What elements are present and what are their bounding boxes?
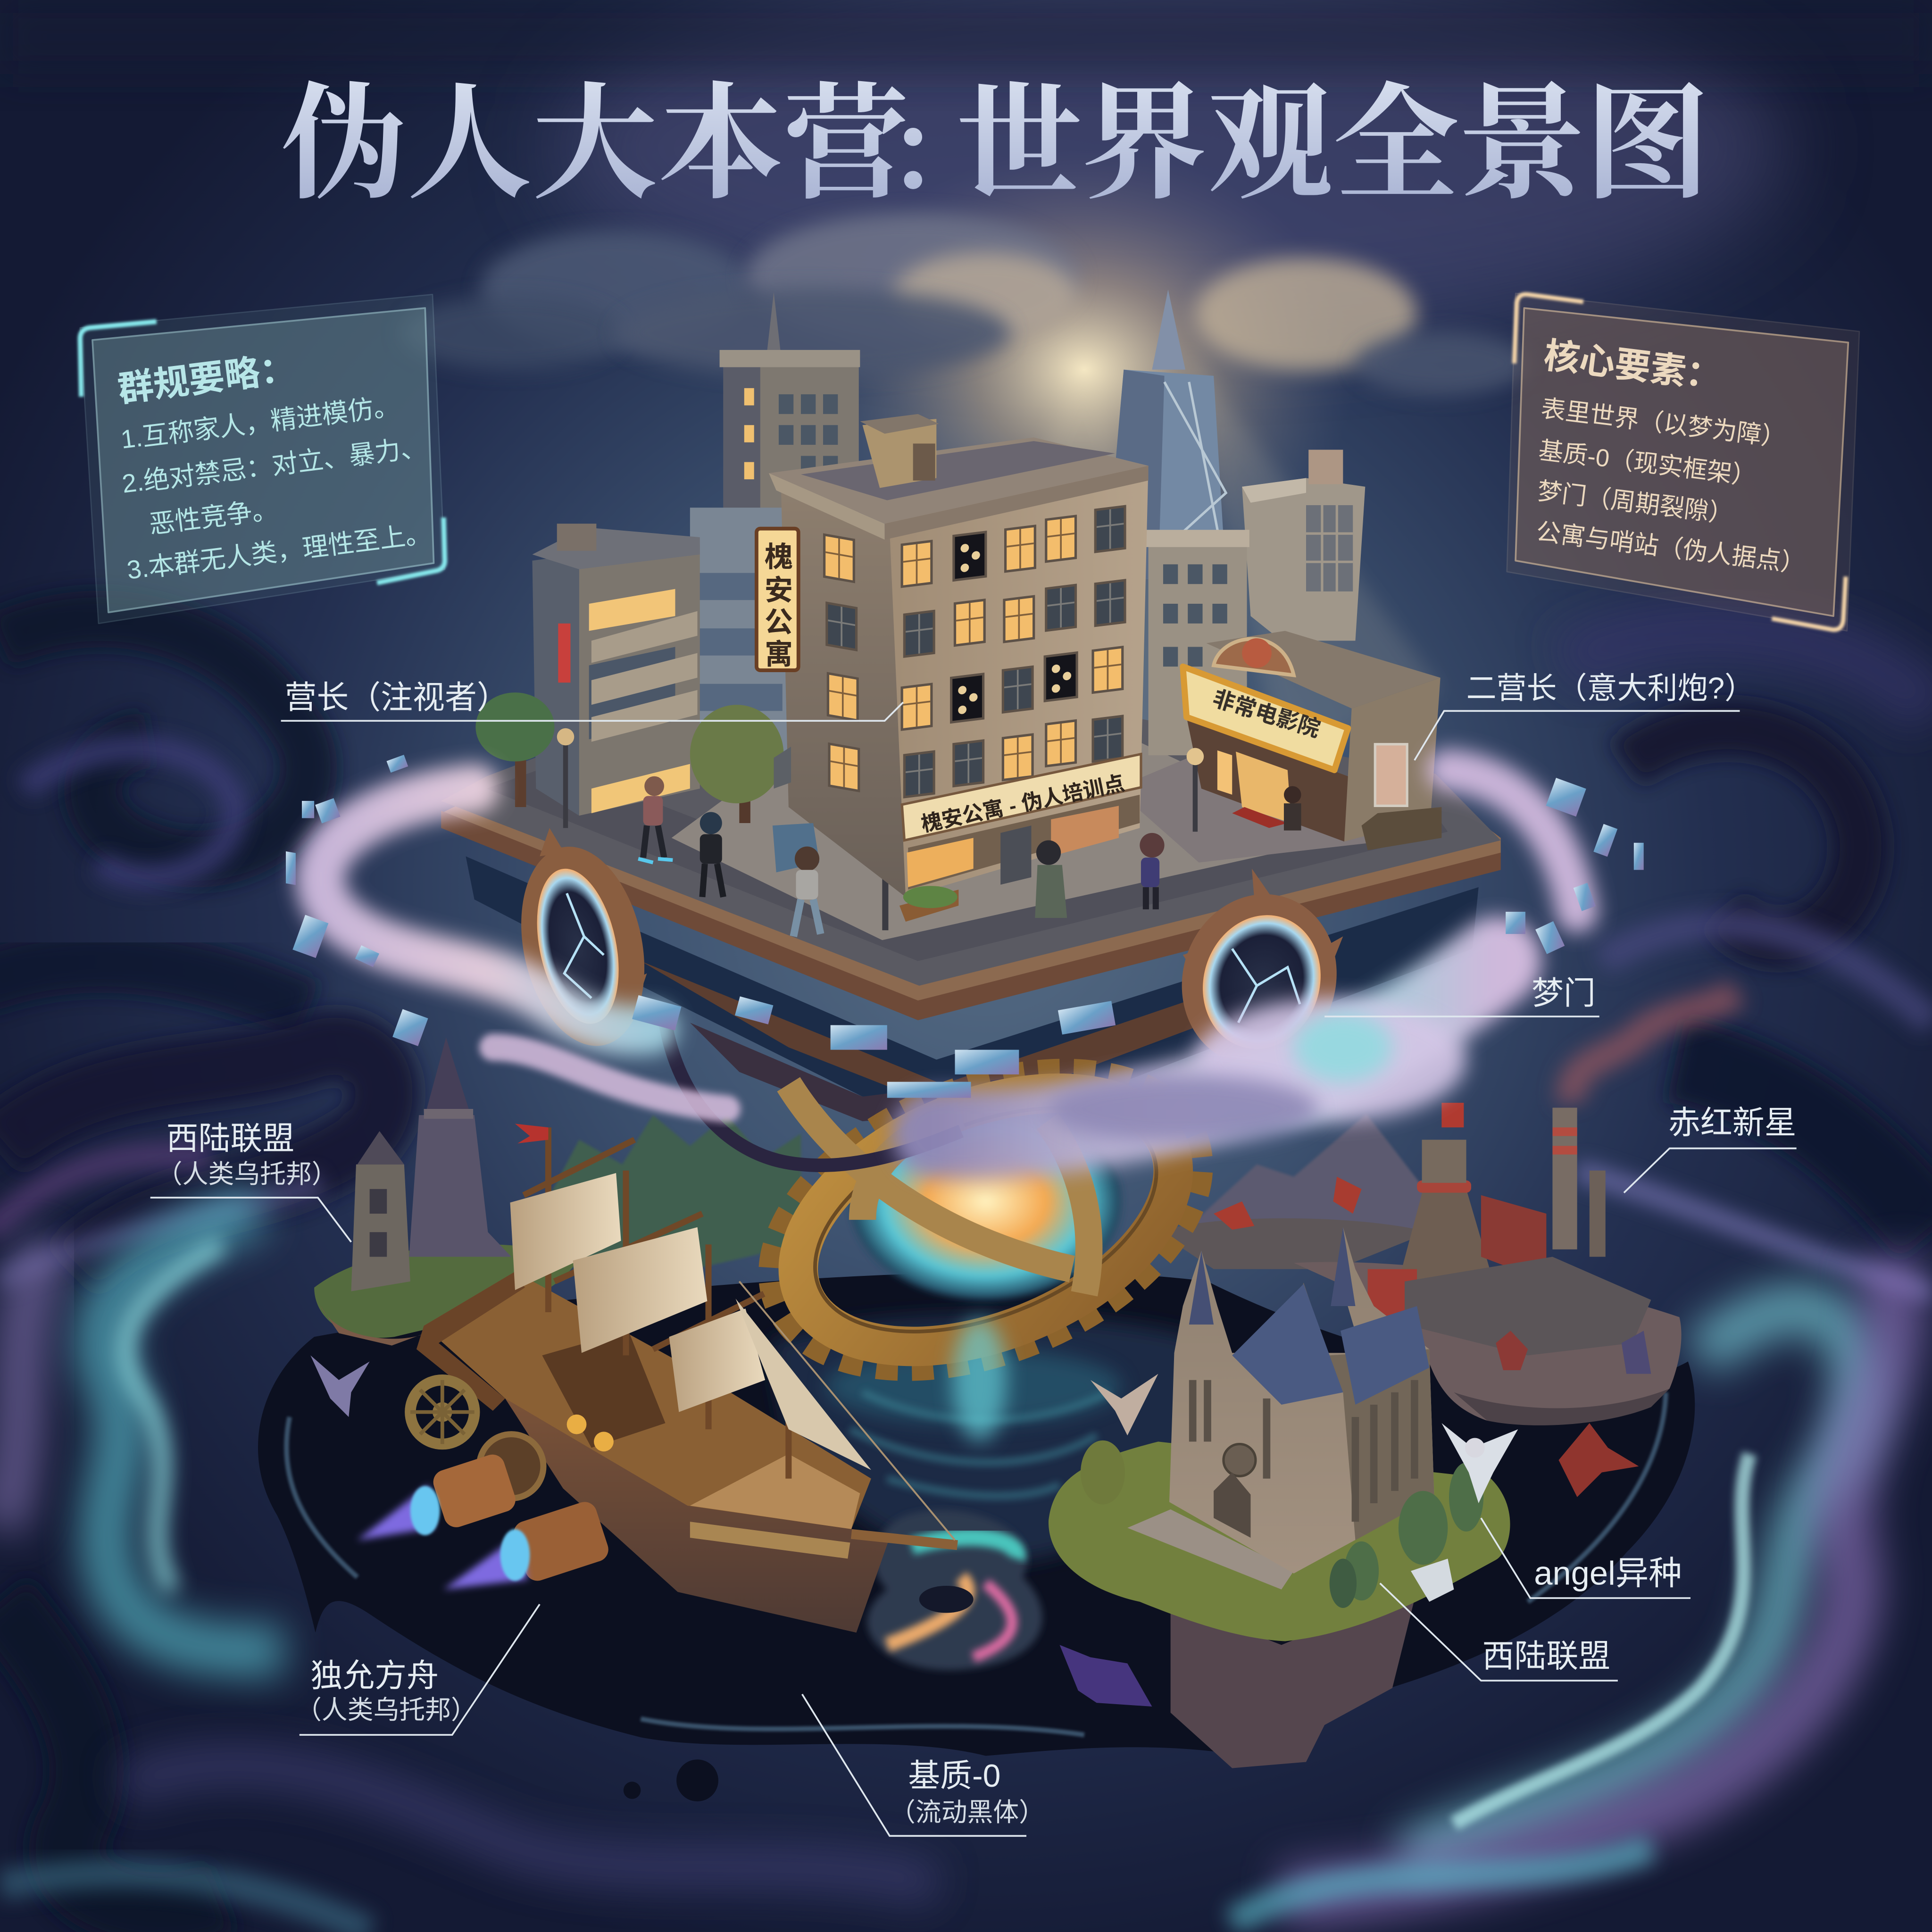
island: west alliance towers	[314, 1038, 579, 1346]
label: 独允方舟: （人类乌托邦）	[296, 1695, 477, 1724]
storm clouds	[400, 148, 1528, 789]
elements list: 公寓与哨站（伪人据点）	[1534, 518, 1807, 578]
airship	[310, 1124, 1639, 1707]
masts	[524, 1127, 789, 1479]
underworld: black fluid substrate	[258, 1272, 1695, 1801]
title: :	[894, 60, 932, 219]
dream portals	[504, 828, 1358, 1085]
icon: thrusters	[358, 1451, 612, 1590]
underside of floating platform	[466, 857, 1479, 1121]
iridescent oil sheen	[867, 1510, 1042, 1670]
rules list	[119, 391, 433, 585]
roof hut	[860, 414, 939, 488]
label: 西陆联盟 人类乌托邦	[150, 1121, 351, 1242]
label: 梦门: 梦门	[1532, 976, 1596, 1011]
elements list	[1534, 395, 1807, 578]
label: angel异种: angel异种	[1534, 1554, 1682, 1591]
windows	[823, 505, 1126, 799]
vertical sign: 槐	[765, 541, 793, 573]
label: 基质-0: （流动黑体）	[890, 1798, 1045, 1827]
label: 西陆联盟	[1380, 1583, 1618, 1681]
label: 基质-0	[802, 1694, 1045, 1836]
panel heading: 群规要略：	[116, 348, 298, 409]
icon: tall dark tower	[409, 1038, 511, 1257]
building: right mid block	[1146, 530, 1249, 755]
icon: small stone tower	[351, 1131, 410, 1291]
icon: angel creature	[1441, 1423, 1518, 1503]
label: 赤红新星	[1624, 1105, 1797, 1193]
label: 赤红新星: 赤红新星	[1668, 1105, 1797, 1141]
watcher eye line marker	[281, 702, 903, 721]
icon: tree left	[475, 692, 555, 807]
hull	[505, 1399, 890, 1632]
island: red nova mountain	[1158, 1114, 1441, 1269]
label: 西陆联盟: 西陆联盟	[1482, 1639, 1610, 1674]
building: glass skyscraper	[1105, 290, 1226, 579]
elements list: 表里世界（以梦为障）	[1540, 395, 1787, 452]
building: back-left tower	[720, 292, 860, 527]
icon: large brass gear	[735, 1021, 1236, 1418]
marquee sign: 非常电影院	[1210, 685, 1323, 742]
label: 营长: 营长（注视者）	[284, 680, 509, 716]
cinema	[1183, 631, 1441, 850]
flag	[515, 1124, 548, 1143]
icon: tree right	[690, 705, 783, 823]
vertical sign	[757, 529, 799, 670]
figure 2	[700, 812, 723, 897]
island: red nova factory	[1294, 992, 1737, 1425]
label: 独允方舟: 独允方舟	[310, 1658, 439, 1694]
elements list: 基质-0（现实框架）	[1537, 437, 1758, 491]
icon: fluid creatures	[310, 1355, 1639, 1707]
rules list: 3.本群无人类，理性至上。	[125, 518, 433, 585]
apartment building	[757, 414, 1149, 922]
shopfront	[899, 795, 1140, 922]
residents	[638, 776, 1301, 936]
gear core	[666, 1021, 1236, 1441]
elements list: 梦门（周期裂隙）	[1536, 477, 1735, 529]
building: blue-grey rear block	[690, 508, 789, 754]
label: 独允方舟	[296, 1604, 540, 1735]
figure 4	[1035, 841, 1067, 918]
marquee sign	[1183, 666, 1348, 770]
title: 世界观全景图	[956, 43, 1710, 224]
rules list: 1.互称家人，精进模仿。	[119, 391, 401, 454]
memory shards	[286, 755, 1644, 1098]
storefront sign	[902, 754, 1141, 841]
vertical sign: 安	[765, 575, 793, 606]
movie poster	[1375, 744, 1407, 806]
icon: street lamp	[557, 728, 1204, 930]
building: right pale tower	[1242, 450, 1365, 641]
distant forest	[517, 1115, 801, 1282]
title: 伪人大本营	[281, 43, 909, 224]
dream mist	[320, 770, 1577, 1143]
label: 二营长: 二营长（意大利炮?）	[1466, 671, 1755, 705]
figure 1	[638, 776, 673, 863]
trees and lamps	[475, 692, 1204, 930]
label: 基质-0: 基质-0	[908, 1758, 1000, 1794]
storefront sign: 槐安公寓 - 伪人培训点	[919, 772, 1126, 836]
west alliance cathedral island	[1049, 1227, 1518, 1768]
icon: tall chimney	[1552, 1108, 1606, 1257]
icon: factory smoke	[1572, 992, 1737, 1103]
vertical sign: 寓	[765, 639, 793, 670]
cathedral	[1169, 1227, 1434, 1574]
vertical sign: 公	[765, 607, 793, 638]
rules list: 2.绝对禁忌：对立、暴力、	[120, 432, 428, 499]
label: 二营长	[1415, 671, 1755, 760]
rules list: 恶性竞争。	[148, 494, 279, 539]
figure 6	[1284, 786, 1301, 831]
label: angel异种	[1481, 1518, 1690, 1598]
icon: reactor tower	[1399, 1103, 1493, 1282]
sails	[510, 1173, 621, 1290]
figure 3	[793, 847, 821, 936]
label: 西陆联盟 人类乌托邦: （人类乌托邦）	[157, 1159, 338, 1189]
building: left balcony block	[532, 524, 700, 816]
panel: core elements	[1507, 293, 1859, 631]
portal right	[1160, 869, 1358, 1085]
portal left	[504, 828, 662, 1058]
city skyline	[532, 290, 1365, 816]
title	[281, 43, 1710, 224]
icon: ship gear wheels	[410, 1380, 543, 1498]
floating platform	[441, 690, 1501, 1020]
label: 西陆联盟 人类乌托邦: 西陆联盟	[167, 1121, 294, 1157]
figure 5	[1140, 833, 1165, 909]
panel heading: 核心要素：	[1541, 335, 1724, 397]
panel: group rules	[80, 294, 445, 624]
icon: flying cherub	[1091, 1374, 1158, 1435]
